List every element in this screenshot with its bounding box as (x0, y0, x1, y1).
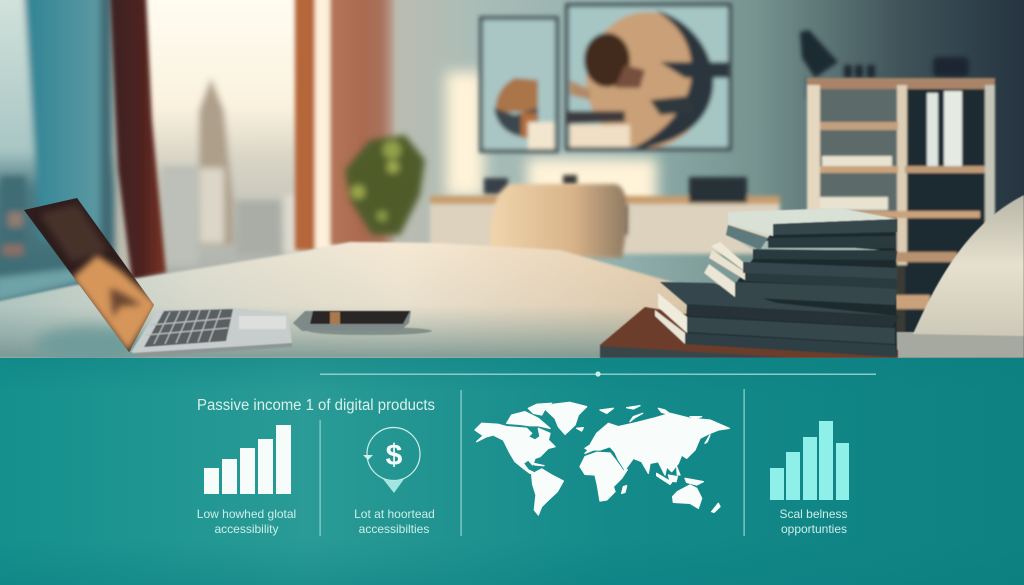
label: lot at hoortead (354, 507, 435, 536)
teal information panel (0, 358, 1024, 585)
eurasia (585, 413, 729, 475)
wall light patches (446, 72, 657, 208)
label: scal belness: opportunties (781, 522, 847, 536)
city window centre with tower (140, 0, 305, 280)
asian islands (657, 435, 710, 485)
south america (532, 469, 563, 515)
label: scal belness (779, 507, 848, 536)
laptop base and keyboard (131, 308, 292, 357)
lower books (655, 220, 900, 357)
desk lamp (800, 30, 838, 98)
icon: dollar in circle with pin (367, 428, 420, 493)
shelf top objects (844, 57, 969, 78)
office chair centre (490, 184, 627, 258)
laptop (20, 195, 292, 357)
tablet (293, 311, 432, 335)
americas (475, 402, 587, 515)
north america (475, 423, 555, 473)
column dividers (320, 389, 745, 536)
greenland (545, 402, 587, 434)
desk shadow by laptop (35, 327, 145, 363)
back wall (0, 0, 1024, 358)
wall art: left frame (481, 18, 557, 151)
office photo background (0, 0, 1024, 363)
white bar chart (204, 425, 291, 494)
label: scal belness: Scal belness (779, 507, 848, 521)
city window left (0, 0, 115, 310)
iceland and caribbean (533, 428, 583, 466)
wall art: right frame (566, 5, 730, 149)
arctic seas islands (600, 406, 702, 422)
laptop screen (24, 198, 154, 352)
world map (475, 402, 729, 515)
book stack (600, 208, 900, 358)
label: low howhed glotal: accessibility (214, 522, 279, 536)
arrowhead on circle (363, 455, 373, 460)
label: lot at hoortead: Lot at hoortead (354, 507, 435, 521)
label: low howhed glotal: Low howhed glotal (197, 507, 296, 521)
new zealand and madagascar (622, 486, 720, 512)
cyan bar chart (770, 421, 849, 500)
label: lot at hoortead: accessibilties (359, 522, 429, 536)
panel background (0, 358, 1024, 585)
arctic islands (507, 403, 552, 428)
brown book (600, 307, 898, 358)
sideboard and objects (430, 175, 780, 254)
bookshelf (807, 78, 995, 333)
top rule with dot (320, 371, 876, 377)
pin pointer (383, 479, 404, 493)
australia (673, 485, 702, 508)
chair right (895, 195, 1024, 358)
curtains (110, 0, 394, 280)
dollar sign: $ (386, 439, 403, 472)
desk surface (0, 242, 900, 358)
panel title: Passive income 1 of digital products (197, 397, 435, 414)
plant (345, 135, 425, 235)
old world (580, 406, 729, 512)
circle arrow (367, 428, 420, 480)
upper books (704, 208, 897, 305)
africa (580, 452, 627, 501)
label: low howhed glotal (197, 507, 296, 536)
